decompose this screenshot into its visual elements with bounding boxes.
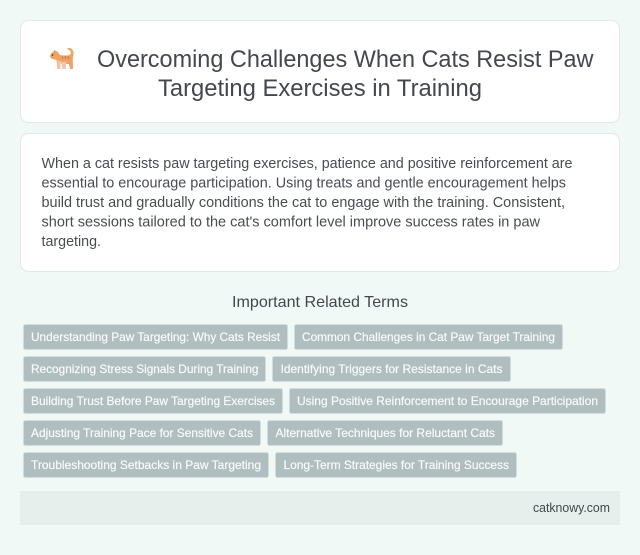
text block: description: targeting. [42, 234, 101, 250]
tag [276, 452, 516, 478]
text block: description: When a cat resists paw targeting exercises, patience and positive reinforcement are [42, 156, 572, 172]
tag: Using Positive Reinforcement to Encourage Participation [297, 394, 598, 408]
text block: description: build trust and gradually conditions the cat to engage with the training. Consistent, [42, 195, 565, 211]
tag [24, 324, 288, 350]
tag: Alternative Techniques for Reluctant Cats [276, 426, 495, 440]
heading: important related terms: Important Related Terms [232, 294, 408, 311]
panel: description card [20, 134, 620, 272]
text block: description [42, 156, 572, 250]
text block: description: essential to encourage participation. Using treats and gentle encouragement helps [42, 176, 566, 192]
title [97, 46, 594, 102]
title: Overcoming Challenges When Cats Resist Paw [97, 46, 594, 73]
tag [24, 420, 260, 446]
tag: Building Trust Before Paw Targeting Exercises [31, 394, 275, 408]
tag: Adjusting Training Pace for Sensitive Cats [31, 426, 253, 440]
tag: Common Challenges in Cat Paw Target Training [302, 330, 555, 344]
footer [20, 491, 620, 525]
panel: title card [20, 20, 620, 122]
tag [268, 420, 502, 446]
tag: Recognizing Stress Signals During Training [31, 362, 258, 376]
tag: Understanding Paw Targeting: Why Cats Resist [31, 330, 281, 344]
tag [24, 356, 266, 382]
tag list [24, 324, 606, 478]
tag: Troubleshooting Setbacks in Paw Targeting [31, 458, 261, 472]
title: Targeting Exercises in Training [158, 75, 482, 102]
text block: description: short sessions tailored to the cat's comfort level improve success rates in paw [42, 214, 541, 230]
tag [290, 388, 606, 414]
tag [24, 452, 268, 478]
tag [24, 388, 282, 414]
tag [294, 324, 562, 350]
tag [272, 356, 510, 382]
icon: cat emoji [50, 48, 74, 69]
tag: Identifying Triggers for Resistance in Cats [280, 362, 502, 376]
footer text: site name: catknowy.com [533, 501, 610, 515]
tag: Long-Term Strategies for Training Success [284, 458, 509, 472]
